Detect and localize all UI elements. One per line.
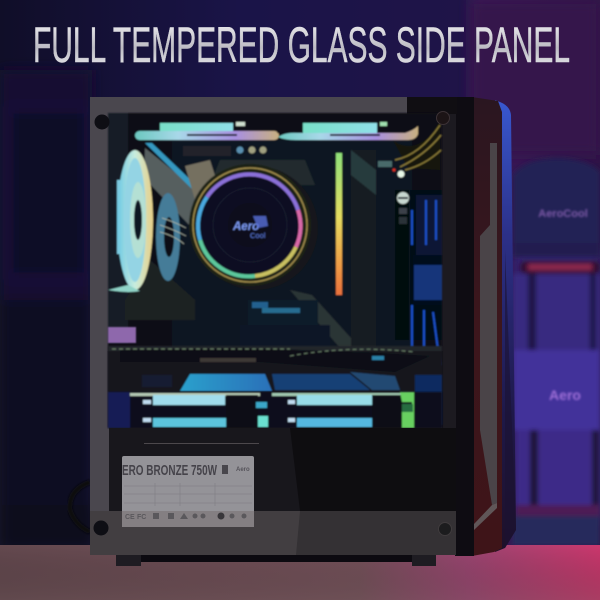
background gaming chair (512, 158, 600, 546)
certification marks: CE (125, 514, 135, 521)
computer case (90, 97, 516, 566)
m2 and blue chipset (240, 300, 330, 347)
label heading: ERO BRONZE 750W (122, 463, 217, 479)
motherboard light diagonal heatsink (144, 148, 197, 232)
case side panel (455, 97, 516, 556)
label table (124, 483, 252, 506)
cpu cooler (189, 164, 318, 290)
certification marks (125, 512, 246, 521)
cooler rgb ring (198, 174, 301, 276)
case screws (94, 112, 452, 536)
top right fan glow (277, 113, 418, 140)
glass front frame (90, 97, 456, 555)
right cables (378, 120, 442, 365)
cooler logo: Cool (250, 231, 266, 240)
center connector glow (256, 402, 268, 427)
case feet (116, 553, 436, 566)
cable behind case (70, 482, 90, 532)
dark lower heatsink (125, 260, 195, 320)
cooler logo: Aero (232, 221, 259, 233)
glass top band (90, 97, 456, 114)
ram heatsink (351, 150, 376, 350)
cooler logo (232, 216, 268, 240)
left rgb fan (108, 150, 153, 292)
rear fan behind (156, 193, 186, 281)
bottom left fan lights (130, 393, 260, 428)
label brand: Aero (236, 467, 250, 473)
chair brand text: AeroCool (538, 208, 588, 220)
top left fan glow (130, 113, 279, 140)
motherboard heatsink top (210, 160, 315, 185)
lower case shroud (90, 428, 456, 555)
case window interior (108, 113, 442, 428)
certification marks: FC (137, 514, 146, 521)
motherboard dots (183, 146, 266, 156)
bottom fans (108, 392, 442, 428)
desk (0, 545, 600, 600)
glass left band (90, 97, 109, 555)
power supply label (122, 456, 254, 527)
motherboard (172, 140, 412, 348)
lilac sticker (108, 327, 136, 343)
ram light strip (336, 153, 342, 295)
gpu blue shroud (180, 374, 272, 391)
graphics card (108, 346, 442, 425)
chair logo: Aero (549, 387, 581, 403)
status leds (392, 168, 409, 224)
bottom right fan lights (272, 392, 414, 428)
